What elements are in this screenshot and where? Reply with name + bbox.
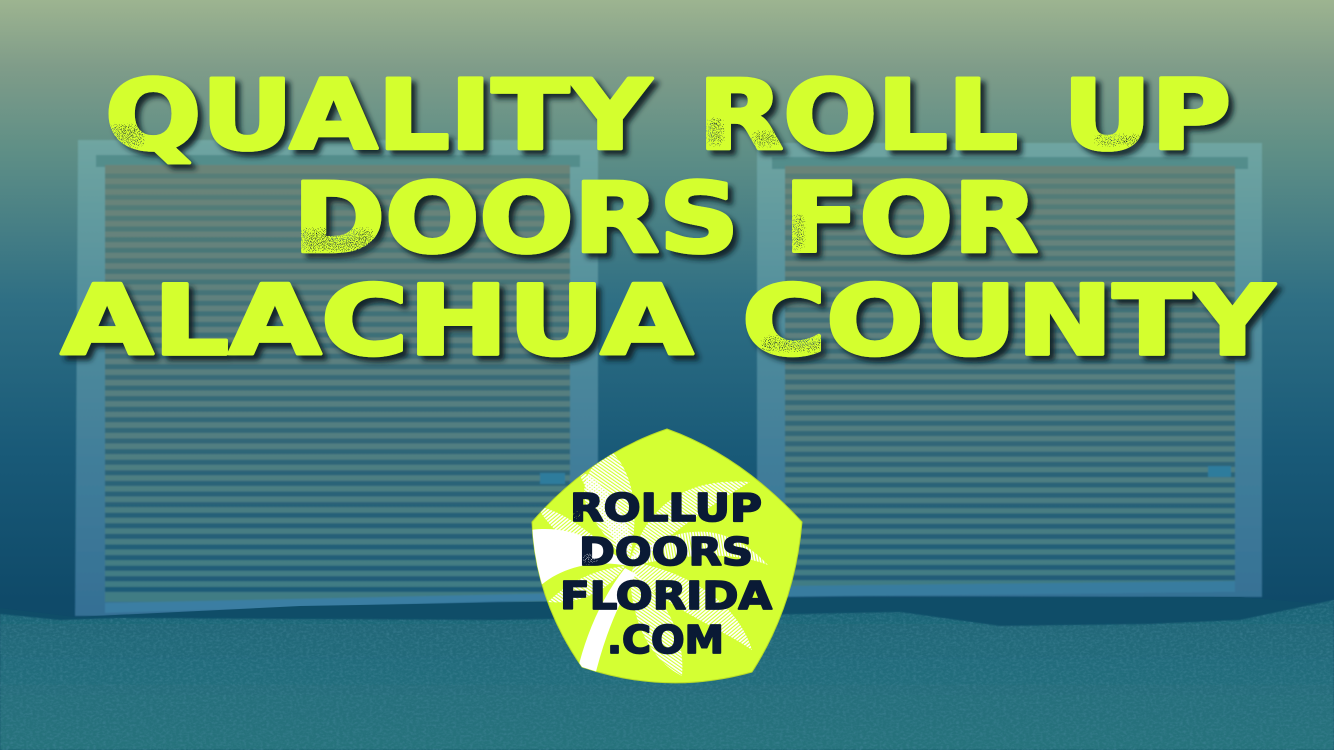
- title line 2: DOORS: [293, 162, 739, 274]
- left door latch: [540, 473, 565, 484]
- logo badge: [530, 429, 802, 683]
- title line 3: ALACHUA: [61, 265, 693, 377]
- right roll up door: [757, 143, 1262, 597]
- badge wordmark: [560, 486, 772, 663]
- title line 3: COUNTY: [742, 265, 1276, 377]
- badge wordmark: .COM: [607, 618, 724, 663]
- badge shape: [532, 429, 802, 683]
- badge wordmark: DOORS: [579, 530, 753, 575]
- badge wordmark: ROLLUP: [570, 486, 762, 531]
- right door latch: [1208, 466, 1231, 477]
- left door slats: [105, 165, 570, 602]
- title line 3: [59, 280, 1285, 366]
- title line 2: [301, 178, 1046, 264]
- foreground: grass: [0, 597, 1334, 750]
- left door bottom bar: [105, 593, 570, 613]
- title: [61, 60, 1276, 377]
- right door header: [772, 157, 1248, 169]
- left door header: [96, 155, 580, 167]
- left roll up door: [75, 140, 598, 616]
- left door frame: [75, 140, 598, 616]
- right door bottom bar: [785, 581, 1235, 597]
- right door slats: [785, 166, 1235, 586]
- right door frame: [757, 143, 1262, 597]
- title line 2: FOR: [784, 162, 1038, 274]
- title line 1: [108, 75, 1238, 174]
- badge wordmark: FLORIDA: [560, 574, 772, 619]
- title line 1: UP: [1063, 60, 1231, 172]
- icon: palm tree: [530, 450, 768, 680]
- title line 1: QUALITY: [105, 60, 653, 172]
- title line 1: ROLL: [698, 60, 1018, 172]
